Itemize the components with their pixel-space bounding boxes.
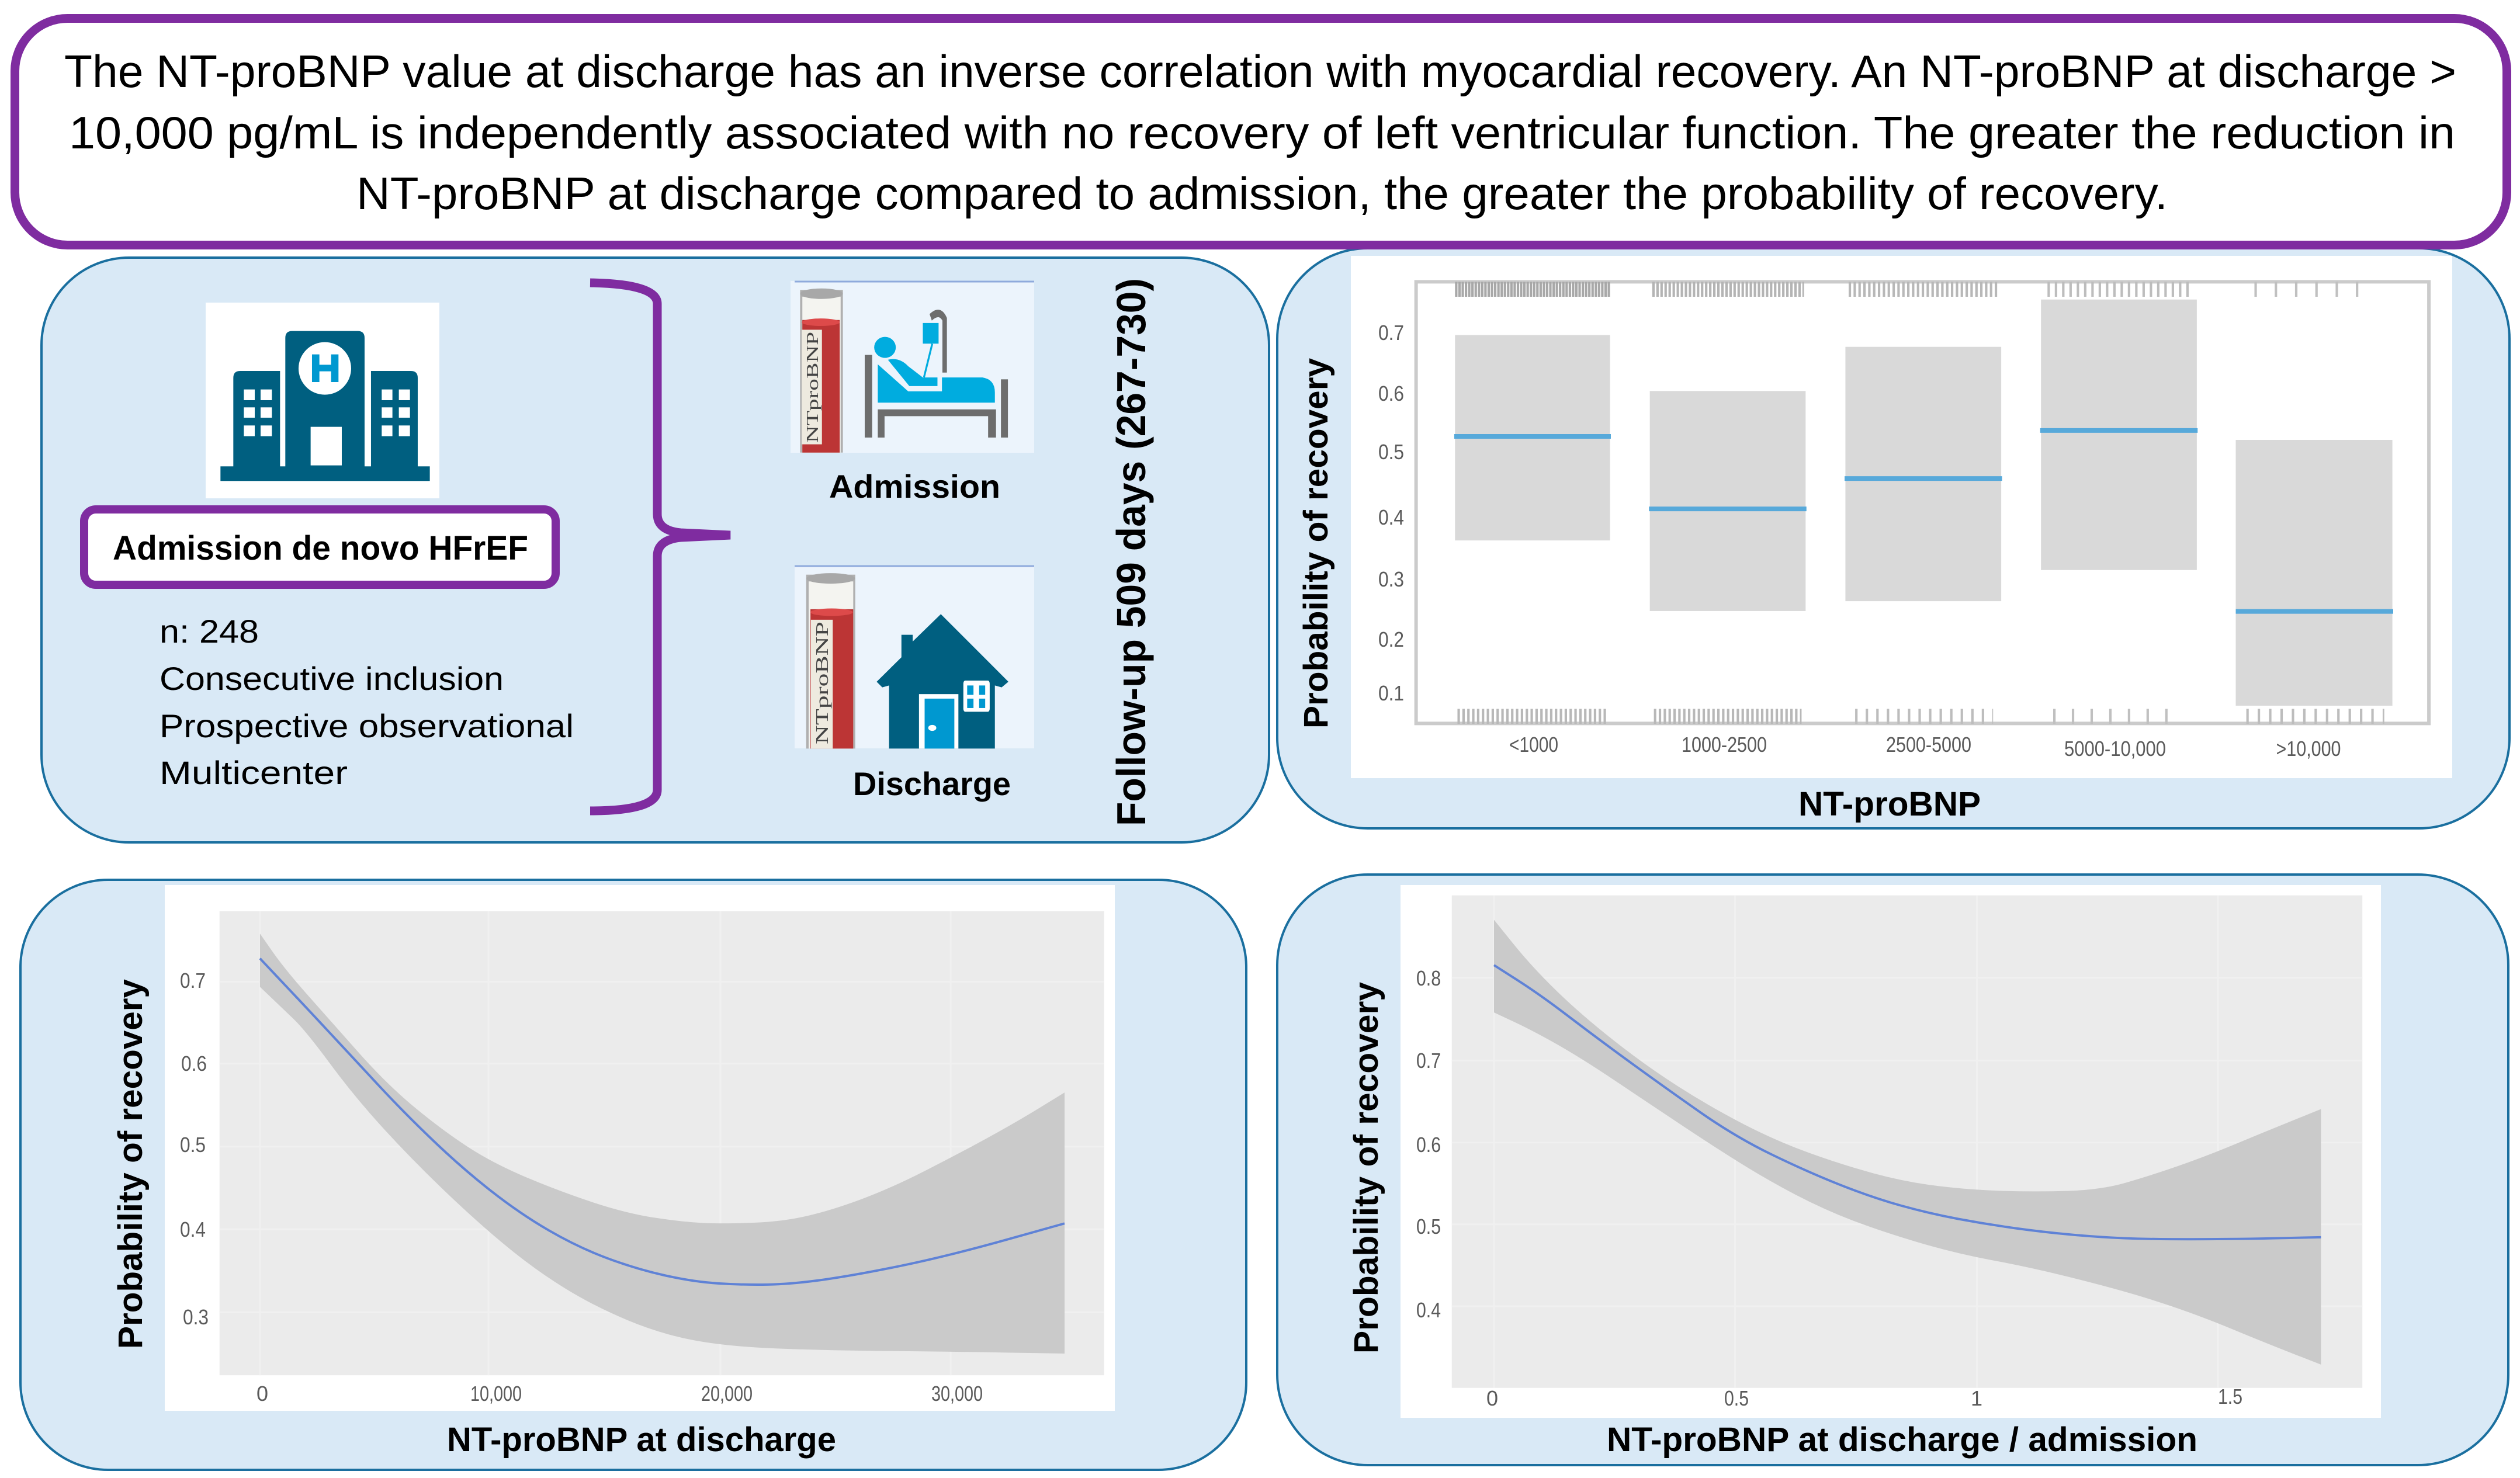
x axis ticks: categories: 2500-5000 bbox=[1886, 733, 1971, 757]
y axis ticks: categories: 0.6 bbox=[1378, 381, 1404, 405]
title text: NT-proBNP at discharge compared to admission, the greater the probability of recovery. bbox=[356, 168, 2168, 219]
callout: admission de novo HFrEF: Admission de novo HFrEF bbox=[113, 529, 528, 567]
x axis title: at discharge: NT-proBNP at discharge bbox=[447, 1421, 836, 1459]
y axis ticks: at discharge: 0.3 bbox=[183, 1305, 209, 1329]
chart: smooth curve ratio bbox=[1452, 896, 2362, 1388]
y axis ticks: ratio: 0.7 bbox=[1416, 1049, 1441, 1073]
y axis title: categories: Probability of recovery bbox=[1297, 358, 1335, 728]
icon: blood tube at discharge: NTproBNP bbox=[812, 622, 832, 744]
follow-up vertical text: Follow-up 509 days (267-730) bbox=[1108, 278, 1154, 826]
x axis ticks: ratio: 1.5 bbox=[2218, 1385, 2242, 1408]
y axis ticks: at discharge: 0.7 bbox=[180, 969, 206, 993]
x axis ticks: at discharge: 10,000 bbox=[470, 1382, 522, 1406]
label: admission: Admission bbox=[829, 468, 1000, 505]
mean lines bbox=[1454, 431, 2393, 612]
icon: blood tube at discharge bbox=[806, 573, 855, 748]
bracket bbox=[590, 283, 730, 811]
x axis ticks: categories: >10,000 bbox=[2276, 737, 2341, 761]
study characteristics list bbox=[160, 613, 574, 791]
y axis title: at discharge: Probability of recovery bbox=[112, 979, 150, 1349]
tile: discharge icons bbox=[795, 565, 1034, 748]
tile: admission icons bbox=[791, 281, 1034, 453]
x axis ticks: categories: 5000-10,000 bbox=[2064, 737, 2166, 761]
chart area: at discharge bbox=[165, 885, 1115, 1411]
y axis ticks: categories: 0.3 bbox=[1378, 567, 1404, 591]
x axis ticks: ratio: 0.5 bbox=[1724, 1386, 1749, 1410]
y axis ticks: categories: 0.1 bbox=[1378, 681, 1404, 705]
study characteristics list: Prospective observational bbox=[160, 707, 574, 744]
fitted line bbox=[260, 959, 1065, 1285]
y axis ticks: ratio bbox=[1416, 966, 1441, 1322]
chart: smooth curve at discharge bbox=[220, 911, 1104, 1375]
panel background: study design bbox=[41, 258, 1269, 842]
x axis ticks: ratio: 1 bbox=[1971, 1386, 1982, 1410]
rug marks bbox=[1455, 289, 2384, 716]
icon: blood tube at admission: NTproBNP bbox=[803, 332, 822, 443]
x axis ticks: categories: 1000-2500 bbox=[1682, 733, 1767, 757]
panel: discharge / admission ratio chart bbox=[1277, 875, 2508, 1465]
confidence boxes bbox=[1455, 300, 2393, 706]
title text bbox=[64, 46, 2456, 219]
y axis ticks: ratio: 0.5 bbox=[1416, 1215, 1441, 1238]
x axis ticks: at discharge: 30,000 bbox=[931, 1382, 983, 1406]
icon: blood tube at admission bbox=[800, 289, 843, 453]
x axis title: ratio: NT-proBNP at discharge / admission bbox=[1607, 1421, 2197, 1459]
panel background: categories bbox=[1277, 248, 2509, 828]
x axis title: categories: NT-proBNP bbox=[1798, 785, 1981, 823]
panel background: ratio bbox=[1277, 875, 2508, 1465]
x axis ticks: ratio: 0 bbox=[1486, 1386, 1498, 1410]
y axis ticks: at discharge: 0.5 bbox=[180, 1133, 206, 1157]
x axis ticks: categories bbox=[1509, 733, 2341, 761]
label: discharge: Discharge bbox=[853, 765, 1011, 802]
panel: NT-proBNP categories chart bbox=[1277, 248, 2509, 828]
confidence ribbon bbox=[260, 934, 1065, 1354]
panel background: at discharge bbox=[20, 880, 1246, 1470]
y axis ticks: categories: 0.5 bbox=[1378, 440, 1404, 464]
icon: patient in bed bbox=[865, 314, 1008, 438]
y axis ticks: categories: 0.2 bbox=[1378, 627, 1404, 651]
callout: admission de novo HFrEF bbox=[84, 509, 556, 585]
title text: 10,000 pg/mL is independently associated with no recovery of left ventricular function. The greater the reduction in bbox=[69, 107, 2455, 158]
y axis ticks: categories: 0.4 bbox=[1378, 505, 1404, 529]
study characteristics list: Multicenter bbox=[160, 754, 348, 791]
panel: study design bbox=[41, 258, 1269, 842]
chart area: ratio bbox=[1401, 885, 2381, 1418]
icon: hospital bbox=[206, 303, 439, 498]
y axis ticks: ratio: 0.4 bbox=[1416, 1298, 1441, 1322]
x axis ticks: ratio bbox=[1486, 1385, 2242, 1410]
title text: The NT-proBNP value at discharge has an inverse correlation with myocardial recovery. An NT-proBNP at discharge > bbox=[64, 46, 2456, 97]
x axis ticks: at discharge: 0 bbox=[256, 1382, 268, 1406]
study characteristics list: n: 248 bbox=[160, 613, 259, 650]
y axis ticks: ratio: 0.6 bbox=[1416, 1133, 1441, 1157]
y axis ticks: categories: 0.7 bbox=[1378, 321, 1404, 345]
study characteristics list: Consecutive inclusion bbox=[160, 660, 504, 697]
y axis ticks: ratio: 0.8 bbox=[1416, 966, 1441, 990]
x axis ticks: at discharge bbox=[256, 1382, 983, 1406]
fitted line bbox=[1494, 965, 2321, 1239]
y axis ticks: at discharge: 0.4 bbox=[180, 1217, 206, 1241]
y axis ticks: at discharge: 0.6 bbox=[181, 1052, 207, 1075]
title box bbox=[15, 19, 2507, 245]
x axis ticks: categories: <1000 bbox=[1509, 733, 1558, 757]
chart: probability by NT-proBNP category bbox=[1416, 282, 2429, 723]
y axis ticks: at discharge bbox=[180, 969, 209, 1329]
confidence ribbon bbox=[1494, 920, 2321, 1365]
x axis ticks: at discharge: 20,000 bbox=[701, 1382, 753, 1406]
y axis title: ratio: Probability of recovery bbox=[1347, 982, 1385, 1354]
icon: house bbox=[876, 614, 1008, 748]
panel: NT-proBNP at discharge chart bbox=[20, 880, 1246, 1470]
y axis ticks: categories bbox=[1378, 321, 1404, 705]
chart area: categories bbox=[1351, 256, 2452, 778]
